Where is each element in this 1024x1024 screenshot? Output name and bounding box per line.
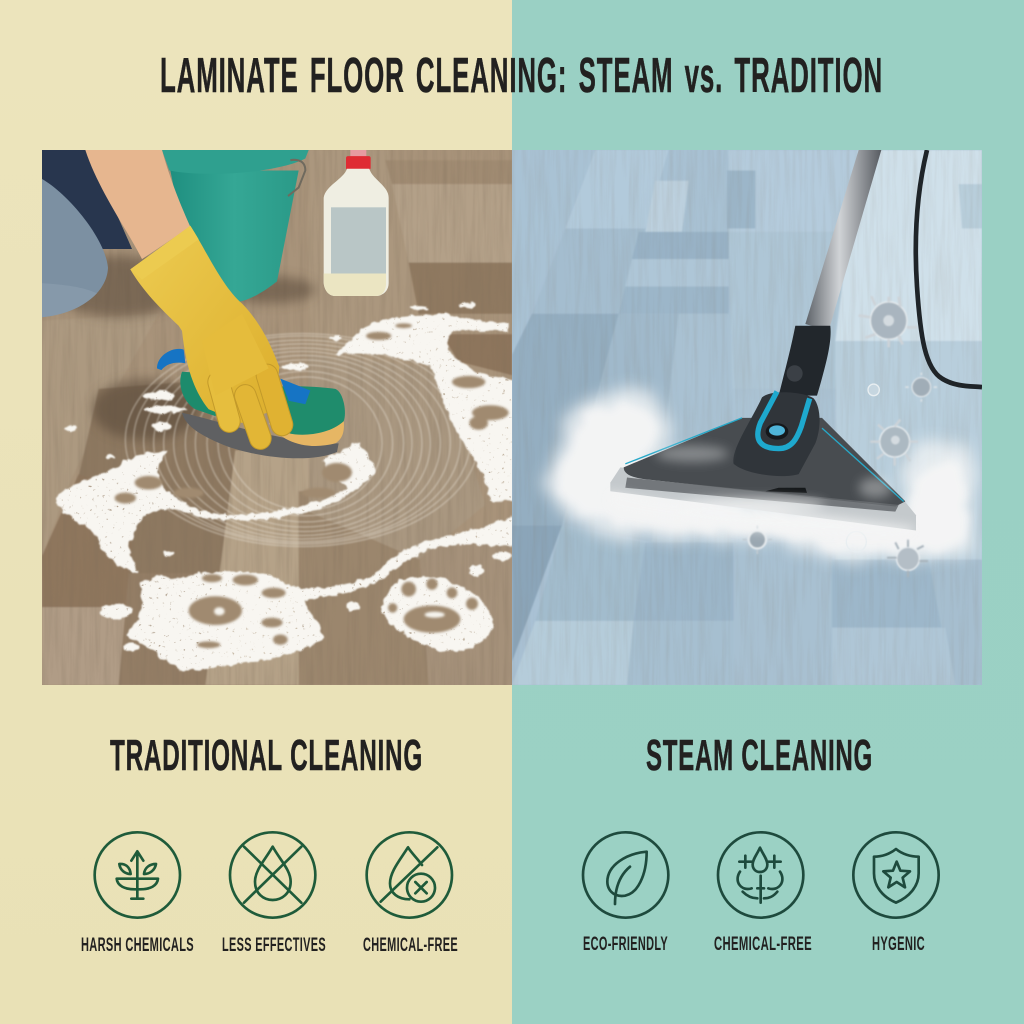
photo: traditional cleaning with soap and sponge — [42, 150, 515, 685]
floor planks — [512, 150, 982, 685]
germ: right small — [905, 372, 937, 402]
panel: traditional background — [0, 0, 512, 1024]
icon: shield with star — [853, 832, 939, 918]
icons row: traditional — [95, 832, 452, 918]
icons row: steam — [583, 832, 939, 918]
wood grain texture — [42, 150, 512, 685]
steam drifting over mop base — [609, 445, 915, 536]
person jeans and knee — [42, 150, 132, 317]
germ: lower centre — [743, 525, 772, 554]
power cord — [916, 150, 982, 387]
steam mop head — [610, 326, 916, 530]
bucket and bottle shadows — [52, 256, 315, 440]
germ: lower right — [887, 540, 928, 577]
photo: steam mop on cool floor — [512, 150, 982, 685]
steam cloud halo — [544, 390, 978, 562]
steam cloud core — [555, 405, 966, 550]
forearm — [85, 150, 190, 259]
swirl of soapy water — [125, 334, 479, 546]
icon: water drop with plus signs — [718, 832, 803, 918]
soap foam — [55, 302, 515, 671]
label: chemical-free (traditional): CHEMICAL-FREE — [363, 934, 458, 956]
germ: top — [859, 296, 917, 347]
foam holes showing floor — [115, 323, 509, 648]
label: harsh chemicals: HARSH CHEMICALS — [81, 934, 194, 956]
icon: crossed-out drop — [230, 832, 315, 918]
floor planks — [42, 150, 512, 685]
brush and sponge — [157, 349, 345, 458]
bubbles — [846, 384, 879, 552]
label: hygenic: HYGENIC — [872, 933, 925, 955]
heading: traditional cleaning: TRADITIONAL CLEANING — [110, 731, 423, 780]
bucket — [162, 150, 309, 302]
chemical bottle — [324, 150, 389, 296]
label: less effectives: LESS EFFECTIVES — [222, 934, 326, 956]
yellow rubber glove — [130, 226, 282, 438]
germ: middle — [870, 420, 918, 466]
wood grain texture — [512, 150, 982, 685]
label: eco-friendly: ECO-FRIENDLY — [583, 933, 668, 955]
icon: plant — [95, 832, 180, 918]
icon: leaf — [583, 832, 668, 918]
chrome mop pole — [805, 150, 881, 331]
icon: drop with no-chemical badge — [367, 832, 452, 918]
panel: steam background — [512, 0, 1024, 1024]
label: chemical-free (steam): CHEMICAL-FREE — [714, 933, 812, 955]
